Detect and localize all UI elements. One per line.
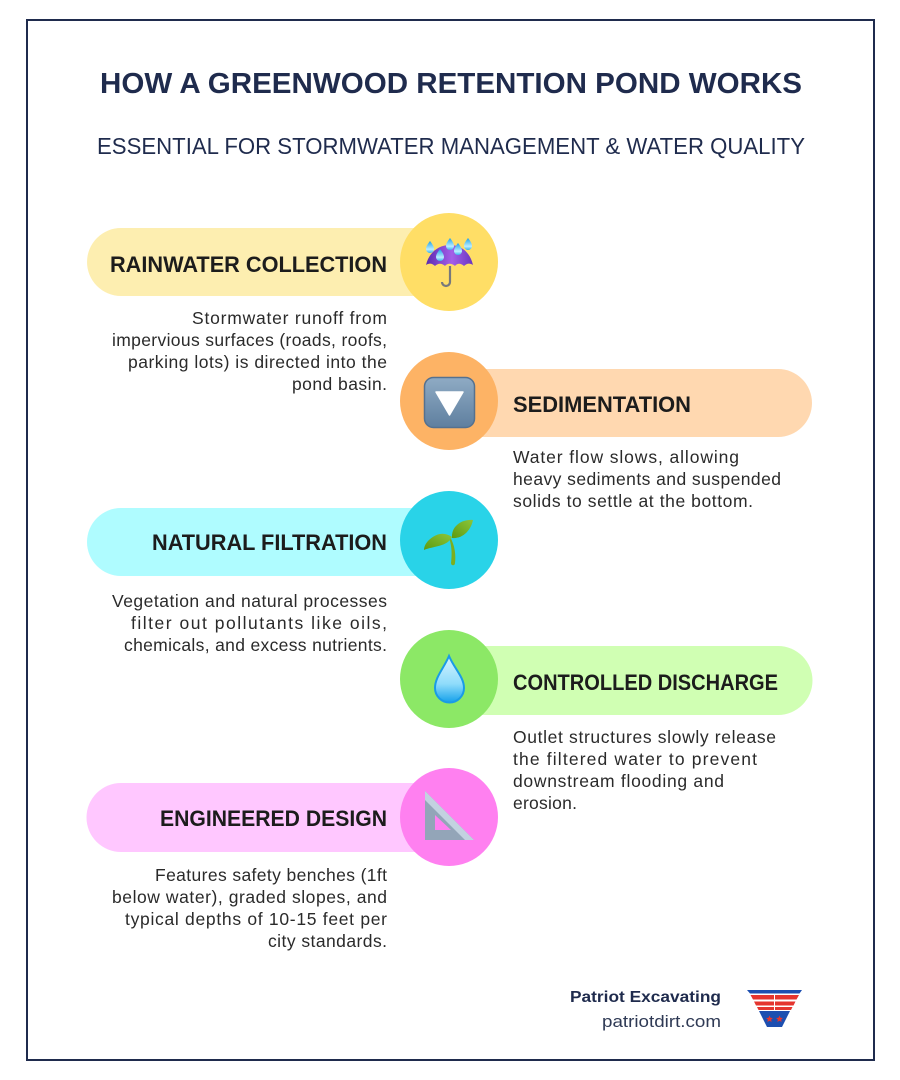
body text: rainwater collection: impervious surfaces (roads, roofs, [112,330,387,350]
body text: rainwater collection: Stormwater runoff from [192,308,387,328]
body text: engineered design: Features safety benches (1ft [155,865,387,885]
body text: rainwater collection [112,308,387,394]
body text: sedimentation [513,447,781,511]
title: HOW A GREENWOOD RETENTION POND WORKS [100,68,802,100]
body text: engineered design: typical depths of 10-15 feet per [125,909,387,929]
step: controlled discharge [400,630,813,813]
body text: controlled discharge: the filtered water to prevent [513,749,757,769]
body text: natural filtration: filter out pollutants like oils, [131,613,387,633]
pill: controlled discharge [450,646,813,715]
body text: controlled discharge: downstream flooding and [513,771,724,791]
circle: sedimentation [400,352,498,450]
circle: natural filtration [400,491,498,589]
body text: rainwater collection: pond basin. [292,374,387,394]
heading: rainwater collection: RAINWATER COLLECTION [110,252,387,277]
body text: controlled discharge [513,727,776,813]
body text: controlled discharge: Outlet structures slowly release [513,727,776,747]
icon: downward button [424,378,474,428]
heading: engineered design: ENGINEERED DESIGN [160,806,387,831]
body text: engineered design: city standards. [268,931,387,951]
heading: controlled discharge: CONTROLLED DISCHARGE [513,670,778,695]
logo: Patriot Excavating [747,990,802,1027]
heading: natural filtration: NATURAL FILTRATION [152,530,387,555]
circle: rainwater collection [400,213,498,311]
pill: engineered design [87,783,440,852]
body text: engineered design: below water), graded slopes, and [112,887,387,907]
icon: seedling [424,520,473,565]
icon: water drop [435,656,464,702]
body text: controlled discharge: erosion. [513,793,577,813]
icon: triangular ruler [425,791,474,840]
circle: engineered design [400,768,498,866]
body text: natural filtration: chemicals, and excess nutrients. [124,635,387,655]
step: rainwater collection [87,213,498,394]
step: engineered design [87,768,498,951]
heading: sedimentation: SEDIMENTATION [513,392,691,417]
body text: engineered design [112,865,387,951]
pill: sedimentation [450,369,812,437]
body text: natural filtration [112,591,387,655]
body text: sedimentation: solids to settle at the bottom. [513,491,753,511]
step: natural filtration [87,491,498,655]
pill: natural filtration [87,508,440,576]
footer: website: patriotdirt.com [602,1013,721,1031]
pill: rainwater collection [87,228,440,296]
body text: rainwater collection: parking lots) is directed into the [128,352,387,372]
body text: sedimentation: Water flow slows, allowing [513,447,739,467]
body text: sedimentation: heavy sediments and suspended [513,469,781,489]
footer: brand name: Patriot Excavating [570,989,721,1006]
body text: natural filtration: Vegetation and natural processes [112,591,387,611]
circle: controlled discharge [400,630,498,728]
subtitle: ESSENTIAL FOR STORMWATER MANAGEMENT & WATER QUALITY [97,133,805,159]
step: sedimentation [400,352,812,511]
icon: umbrella with rain [426,238,473,286]
